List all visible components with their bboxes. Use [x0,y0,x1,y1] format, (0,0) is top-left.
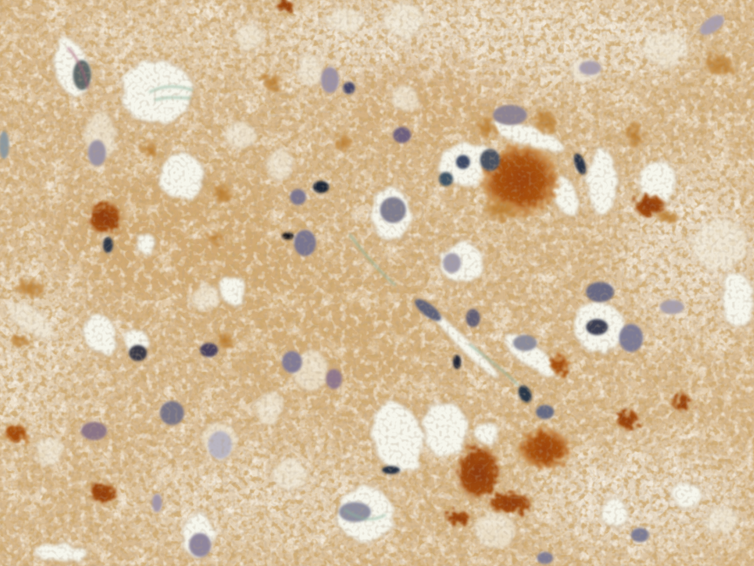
plaque: lower centre [444,427,573,526]
plaque: upper right [476,108,562,222]
green vessel strands [68,48,518,519]
